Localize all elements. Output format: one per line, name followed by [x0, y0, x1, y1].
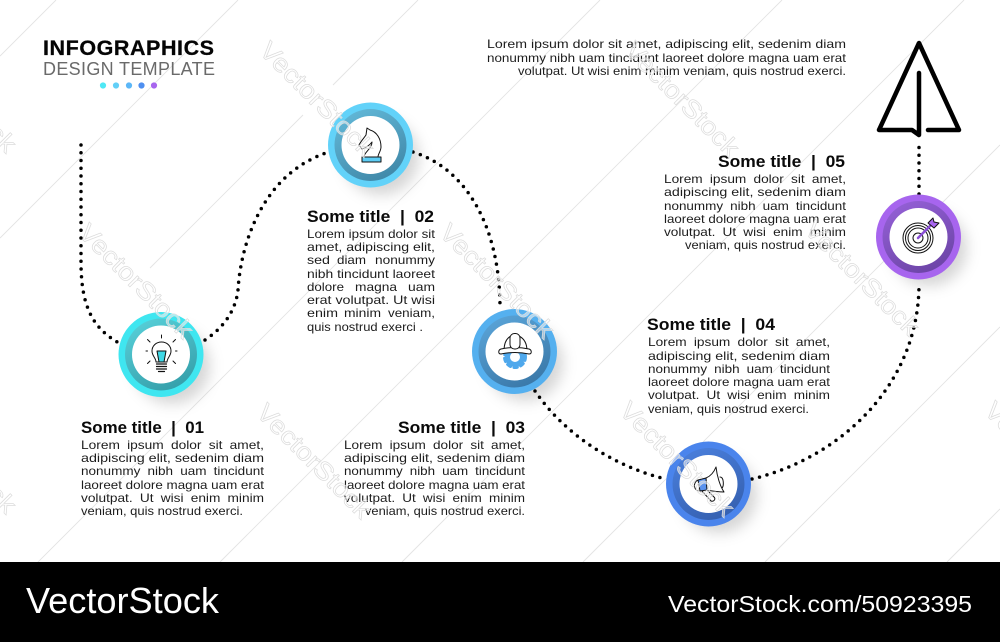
text block: step 02: quis nostrud exerci . — [307, 320, 423, 334]
text block: top paragraph: Lorem ipsum dolor sit amet, adipiscing elit, sedenim diam — [487, 37, 846, 51]
text block: step 02: nibh tincidunt laoreet — [307, 267, 436, 281]
text block: step 02: sed — [307, 253, 330, 267]
watermarks: VectorStock — [434, 218, 560, 345]
text block: step 01: nonummy nibh uam tincidunt — [81, 464, 265, 478]
icon: helmet and gear — [499, 334, 531, 368]
text block: step 05: Lorem ipsum dolor sit amet, — [664, 172, 846, 186]
watermarks: VectorStock — [254, 36, 380, 163]
text block: step 01 — [81, 418, 265, 518]
text block: step 02: diam — [337, 253, 366, 267]
watermarks: VectorStock — [799, 215, 925, 342]
watermarks: VectorStock — [251, 398, 377, 525]
icon: dart target — [903, 218, 939, 253]
text block: top paragraph: nonummy nibh uam tincidunt laoreet dolore magna uam erat — [487, 51, 847, 65]
icon: paper plane — [879, 43, 959, 135]
text block: top paragraph — [487, 37, 847, 78]
footer bar — [0, 562, 1000, 642]
text block: step 04: laoreet dolore magna uam erat — [648, 375, 831, 389]
text block: step 04: veniam, quis nostrud exerci. — [648, 402, 809, 416]
text block: step 05 — [664, 152, 847, 252]
text block: step 01: veniam, quis nostrud exerci. — [81, 504, 243, 518]
footer image id: VectorStock.com/50923395 — [668, 591, 972, 617]
text block: step 04 — [647, 315, 831, 416]
text block: step 03: nonummy nibh uam tincidunt — [344, 464, 526, 478]
text block: step 01: adipiscing elit, sedenim diam — [81, 451, 264, 465]
watermarks: VectorStock — [614, 396, 740, 523]
text block: step 03: volutpat. Ut wisi enim minim — [344, 491, 525, 505]
text block: step 04: nonummy nibh uam tincidunt — [648, 362, 831, 376]
text block: step 05: veniam, quis nostrud exerci. — [685, 238, 846, 252]
title 04: Some title | 04 — [647, 315, 776, 334]
icon: megaphone — [694, 467, 724, 501]
text block: step 01: laoreet dolore magna uam erat — [81, 478, 265, 492]
text block: step 02: minim — [344, 306, 381, 320]
text block: step 03: laoreet dolore magna uam erat — [344, 478, 526, 492]
text block: step 03: veniam, quis nostrud exerci. — [365, 504, 525, 518]
icon: chess knight — [359, 128, 381, 162]
text block: step 02: uam — [408, 280, 435, 294]
text block: step 02: veniam, — [388, 306, 435, 320]
text block: step 01: volutpat. Ut wisi enim minim — [81, 491, 264, 505]
step 04 node — [666, 442, 757, 533]
subheading: DESIGN TEMPLATE — [43, 59, 215, 79]
text block: step 02: magna — [355, 280, 397, 294]
text block: step 05: laoreet dolore magna uam erat — [664, 212, 847, 226]
watermarks — [0, 32, 1000, 525]
text block: step 02: Lorem ipsum dolor sit — [307, 227, 436, 241]
step colour dots — [100, 82, 157, 89]
watermarks: VectorStock — [73, 218, 199, 345]
text block: step 02: enim — [307, 306, 338, 320]
text block: step 02: dolore — [307, 280, 344, 294]
text block: top paragraph: volutpat. Ut wisi enim minim veniam, quis nostrud exerci. — [518, 64, 846, 78]
text block: step 04: adipiscing elit, sedenim diam — [648, 349, 830, 363]
header: infographics design template — [43, 36, 215, 89]
title 01: Some title | 01 — [81, 418, 204, 437]
step 02 node — [328, 102, 419, 195]
text block: step 03 — [344, 418, 526, 518]
step 03 node — [472, 309, 563, 401]
title 03: Some title | 03 — [398, 418, 525, 437]
main heading: INFOGRAPHICS — [43, 36, 214, 60]
text block: step 02 — [307, 207, 436, 334]
step 05 node — [876, 194, 967, 286]
text block: step 02: erat volutpat. Ut wisi — [307, 293, 435, 307]
text block: step 02: nonummy — [375, 253, 435, 267]
text block: step 05: nonummy nibh uam tincidunt — [664, 199, 847, 213]
text block: step 05: adipiscing elit, sedenim diam — [664, 185, 846, 199]
text block: step 03: adipiscing elit, sedenim diam — [344, 451, 525, 465]
text block: step 01: Lorem ipsum dolor sit amet, — [81, 438, 264, 452]
step 01 node — [118, 312, 210, 404]
dotted route line — [81, 142, 919, 479]
text block: step 03: Lorem ipsum dolor sit amet, — [344, 438, 525, 452]
icon: light bulb — [146, 335, 177, 372]
text block: step 05: volutpat. Ut wisi enim minim — [664, 225, 846, 239]
footer logo text: VectorStock — [26, 580, 220, 621]
watermarks: VectorStock — [619, 36, 745, 163]
text block: step 02: amet, adipiscing elit, — [307, 240, 435, 254]
title 02: Some title | 02 — [307, 207, 434, 226]
title 05: Some title | 05 — [718, 152, 845, 171]
text block: step 04: Lorem ipsum dolor sit amet, — [648, 335, 830, 349]
text block: step 04: volutpat. Ut wisi enim minim — [648, 388, 830, 402]
